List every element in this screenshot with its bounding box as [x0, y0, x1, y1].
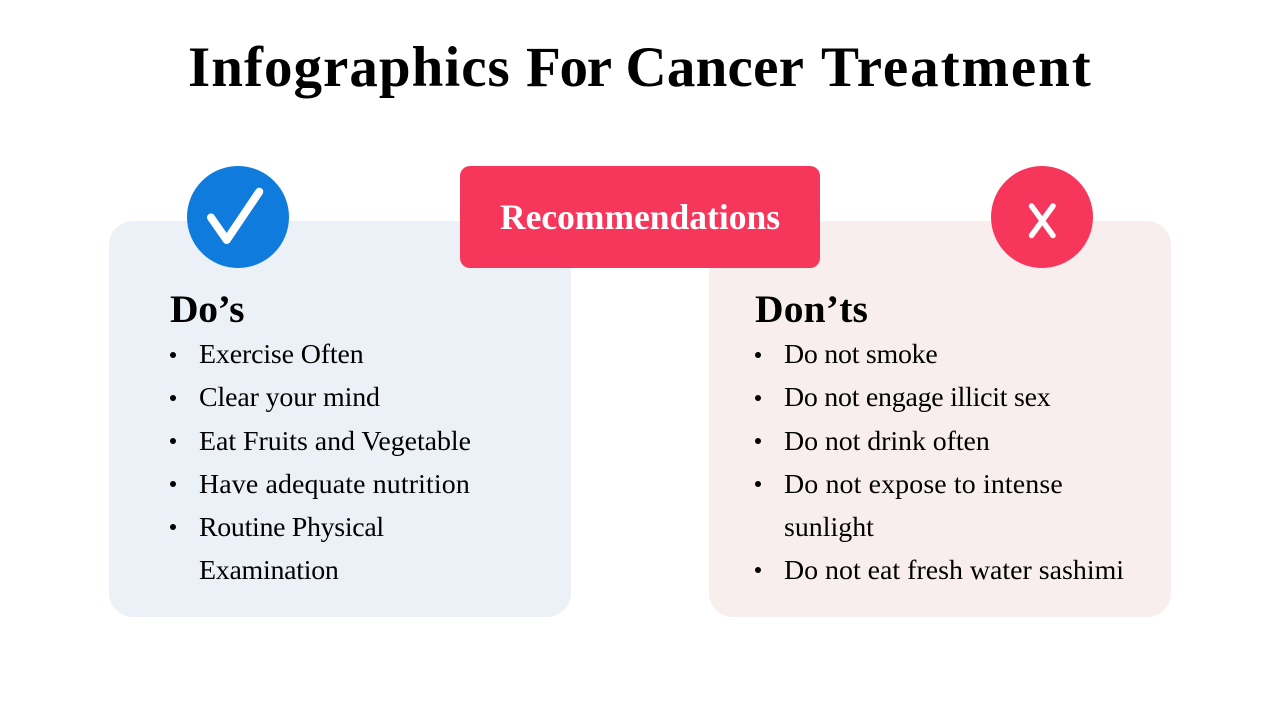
list: don'ts: Do not engage illicit sex: [784, 382, 1050, 413]
title: Infographics: [188, 36, 511, 99]
list: don'ts: Do not eat fresh water sashimi: [784, 555, 1124, 586]
banner: recommendations: [460, 166, 820, 268]
icon: cross mark: [991, 166, 1093, 268]
title: Cancer: [626, 36, 804, 99]
panel: do's: [109, 221, 571, 617]
list: don'ts: Do not smoke: [784, 339, 938, 370]
banner: recommendations: Recommendations: [500, 197, 780, 237]
heading: do's: Do’s: [170, 287, 244, 331]
list: don'ts: Do not expose to intense: [784, 469, 1063, 500]
list: don'ts: Do not drink often: [784, 426, 990, 457]
list: do's: Clear your mind: [199, 382, 380, 413]
list: don'ts: sunlight: [784, 512, 874, 543]
list: do's: Routine Physical: [199, 512, 384, 543]
panel: don'ts: [709, 221, 1171, 617]
title: [188, 36, 1093, 99]
title: For: [526, 36, 611, 99]
list: do's: Examination: [199, 555, 339, 586]
list: don'ts: [755, 339, 1124, 586]
list: do's: Exercise Often: [199, 339, 364, 370]
title: Treatment: [821, 36, 1093, 99]
icon: check mark: [187, 166, 289, 268]
list: do's: [170, 339, 471, 586]
heading: don'ts: Don’ts: [755, 287, 868, 331]
list: do's: Eat Fruits and Vegetable: [199, 426, 471, 457]
list: do's: Have adequate nutrition: [199, 469, 470, 500]
